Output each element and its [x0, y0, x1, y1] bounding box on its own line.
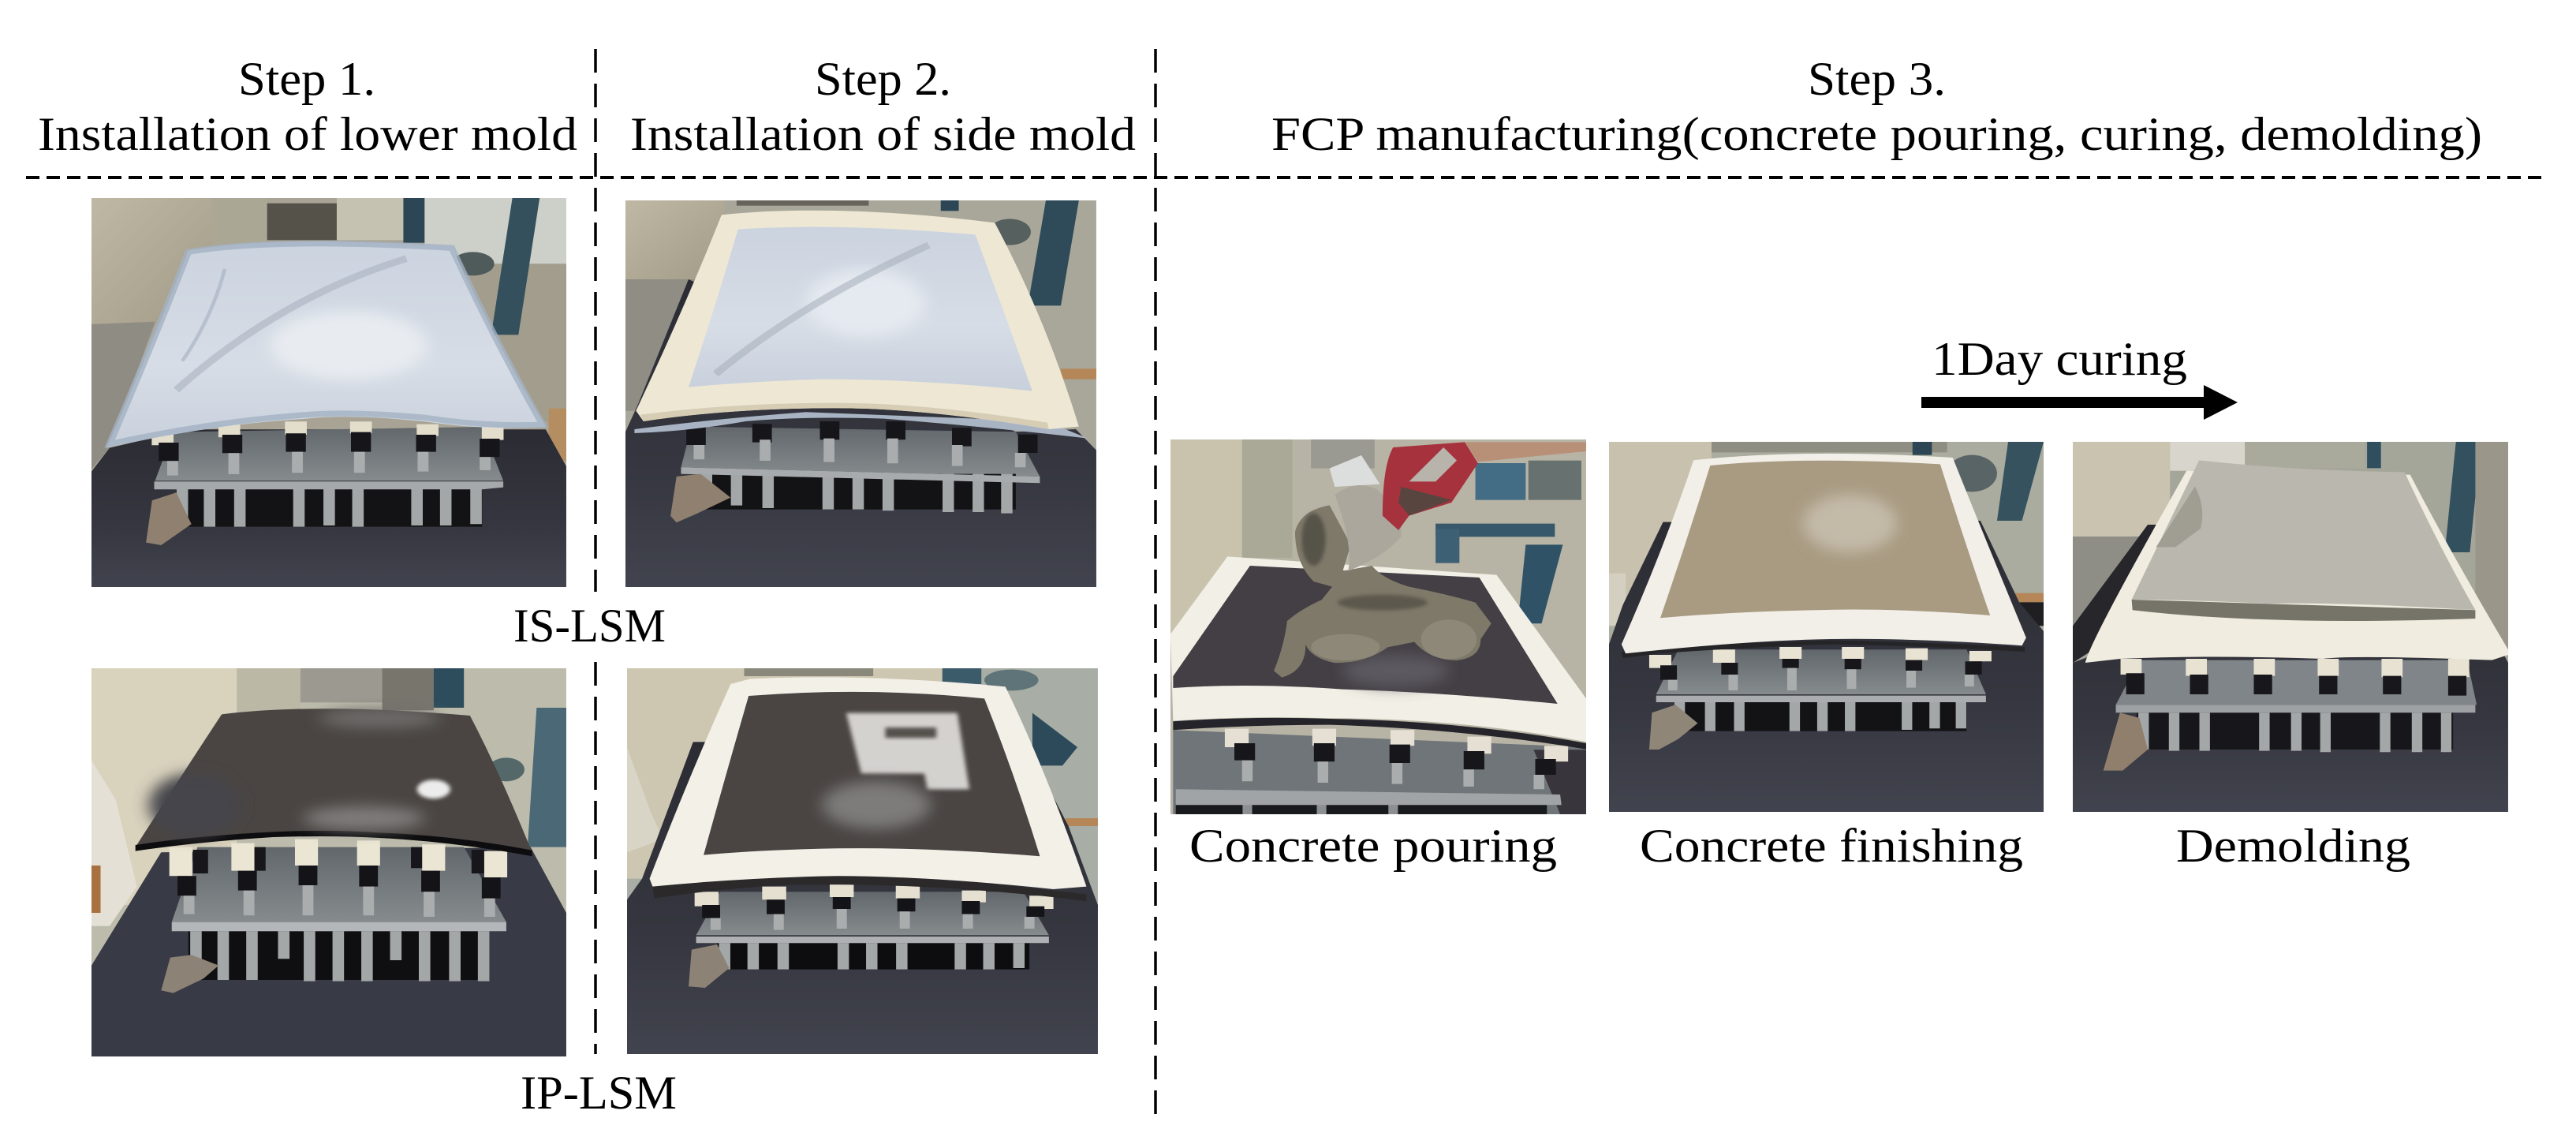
photo: concrete finishing [1609, 442, 2044, 812]
label: IP-LSM: IP-LSM [521, 1067, 677, 1119]
label: demolding: Demolding [2176, 820, 2410, 872]
photo: IP-LSM side mold installed [627, 668, 1098, 1054]
heading: step 1: Installation of lower mold [38, 108, 577, 160]
heading: step 3 [1271, 53, 2482, 160]
heading: step 2 [630, 53, 1136, 160]
label: IS-LSM: IS-LSM [513, 600, 666, 652]
photo: concrete pouring [1170, 439, 1586, 814]
heading: step 3: Step 3. [1808, 53, 1946, 105]
heading: step 1: Step 1. [238, 53, 375, 105]
label: 1Day curing: 1Day curing [1932, 333, 2187, 385]
label: concrete finishing: Concrete finishing [1640, 820, 2023, 872]
photo: IP-LSM lower mold installed [91, 668, 566, 1056]
heading: step 3: FCP manufacturing(concrete pouring, curing, demolding) [1271, 108, 2482, 160]
heading: step 1 [38, 53, 577, 160]
heading: step 2: Installation of side mold [630, 108, 1136, 160]
photo: IS-LSM lower mold installed [91, 198, 566, 587]
heading: step 2: Step 2. [815, 53, 951, 105]
label: concrete pouring: Concrete pouring [1189, 820, 1557, 872]
photo: demolding [2073, 442, 2508, 812]
arrow: 1 day curing [1921, 385, 2238, 420]
photo: IS-LSM side mold installed [625, 200, 1096, 587]
